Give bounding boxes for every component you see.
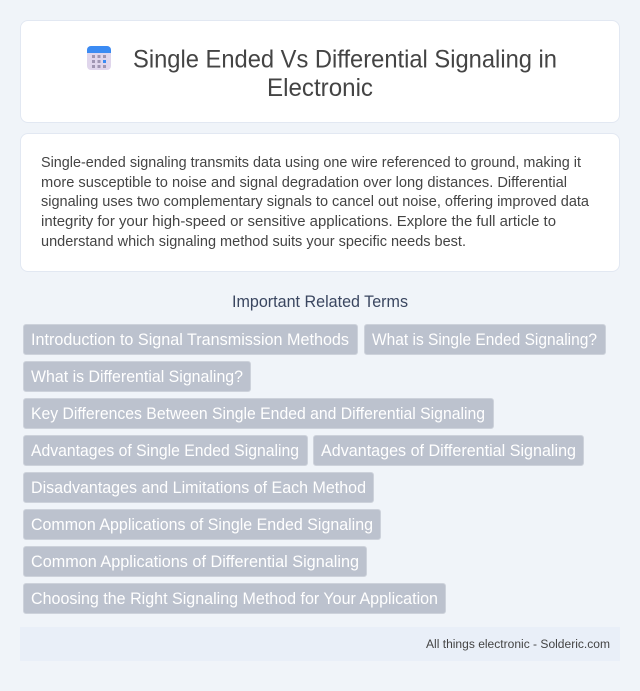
chip labels: Common Applications of Differential Signaling bbox=[31, 553, 359, 571]
chip labels: Introduction to Signal Transmission Methods bbox=[31, 331, 349, 349]
heading: important related terms: Important Related Terms bbox=[232, 293, 408, 311]
title bbox=[133, 46, 557, 102]
chip: introduction bbox=[23, 324, 358, 355]
chip: applications differential bbox=[23, 546, 367, 577]
text block: description: signaling uses two complementary signals to cancel out noise, offering improved data bbox=[41, 194, 590, 210]
chip: choosing bbox=[23, 583, 446, 614]
chip labels: Choosing the Right Signaling Method for Your Application bbox=[31, 590, 438, 608]
chip: single ended bbox=[364, 324, 606, 355]
title: Single Ended Vs Differential Signaling in bbox=[133, 46, 557, 74]
text block: description: integrity for your high-speed or sensitive applications. Explore the full article to bbox=[41, 214, 556, 230]
chip: applications single bbox=[23, 509, 381, 540]
text block: description bbox=[41, 155, 590, 250]
chip labels: Common Applications of Single Ended Signaling bbox=[31, 516, 373, 534]
panel: description card bbox=[20, 133, 620, 272]
chip labels: Key Differences Between Single Ended and Differential Signaling bbox=[31, 405, 485, 423]
text block: description: more susceptible to noise and signal degradation over long distances. Differential bbox=[41, 175, 567, 191]
chip: key differences bbox=[23, 398, 494, 429]
chip: advantages differential bbox=[313, 435, 584, 466]
chip labels: Advantages of Single Ended Signaling bbox=[31, 442, 299, 460]
chip labels: Advantages of Differential Signaling bbox=[321, 442, 576, 460]
header card bbox=[20, 20, 620, 123]
chip: differential bbox=[23, 361, 251, 392]
title: Electronic bbox=[267, 74, 373, 102]
chip: disadvantages bbox=[23, 472, 374, 503]
footer text: All things electronic - Solderic.com bbox=[426, 637, 610, 651]
chip labels: What is Single Ended Signaling? bbox=[372, 331, 597, 349]
text block: description: Single-ended signaling transmits data using one wire referenced to ground, making it bbox=[41, 155, 581, 171]
chip labels: What is Differential Signaling? bbox=[31, 368, 243, 386]
footer bar bbox=[20, 627, 620, 661]
chip labels: Disadvantages and Limitations of Each Method bbox=[31, 479, 366, 497]
panel: term chips bbox=[23, 324, 606, 614]
chip: advantages single bbox=[23, 435, 308, 466]
text block: description: understand which signaling method suits your specific needs best. bbox=[41, 234, 466, 250]
